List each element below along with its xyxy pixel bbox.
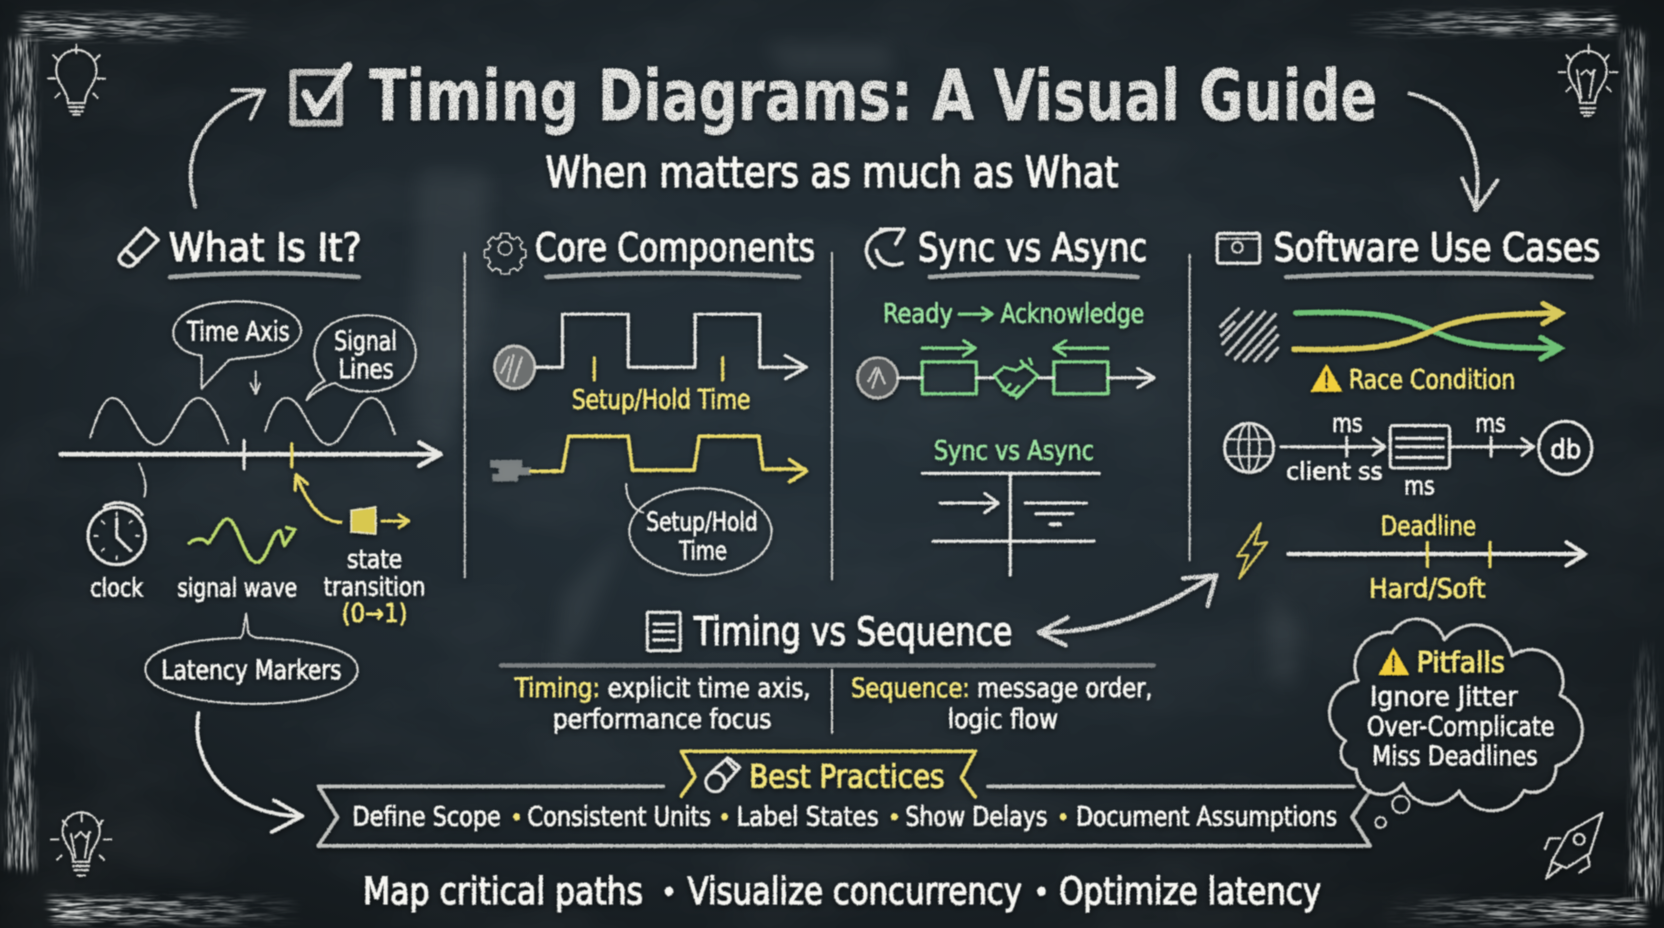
practice items: • bbox=[718, 804, 731, 832]
icon: circular arrows bbox=[866, 229, 904, 267]
footer: • bbox=[661, 875, 677, 910]
footer: Visualize concurrency bbox=[688, 870, 1022, 913]
race condition lines bbox=[1294, 304, 1561, 359]
label: state transition: transition bbox=[324, 572, 426, 602]
label: state transition bbox=[324, 545, 426, 629]
pitfall items: Over-Complicate bbox=[1367, 711, 1555, 742]
text: sequence bbox=[851, 673, 1152, 735]
heading: software use cases: Software Use Cases bbox=[1273, 226, 1600, 271]
panel: timing vs sequence bbox=[501, 610, 1154, 735]
label: ready acknowledge bbox=[883, 299, 1144, 330]
heading: sync vs async: Sync vs Async bbox=[918, 226, 1147, 271]
subtitle: When matters as much as What bbox=[545, 149, 1119, 198]
callout: signal lines bbox=[307, 315, 416, 400]
practice items: Define Scope bbox=[352, 802, 501, 833]
practice items: • bbox=[1057, 804, 1069, 832]
heading: best practices: Best Practices bbox=[749, 757, 944, 795]
panel: sync vs async bbox=[857, 226, 1155, 575]
text: timing: performance focus bbox=[553, 704, 772, 735]
sync async table bbox=[922, 473, 1099, 575]
arrow: double headed bbox=[1039, 575, 1216, 645]
icon: hatch bbox=[1220, 309, 1278, 361]
label: deadline: Deadline bbox=[1381, 511, 1476, 542]
icon: list bbox=[647, 612, 680, 651]
setup/hold clock waveform bbox=[495, 314, 807, 388]
pitfall items: Ignore Jitter bbox=[1370, 682, 1518, 713]
text: timing: Timing: explicit time axis, bbox=[514, 673, 811, 704]
label: state transition: state bbox=[347, 545, 402, 575]
latency path bbox=[1225, 409, 1592, 502]
arrow: to best practices bbox=[197, 713, 302, 832]
heading: timing vs sequence: Timing vs Sequence bbox=[693, 610, 1012, 655]
callout: latency markers: Latency Markers bbox=[161, 655, 342, 686]
icon: lightbulb bottom left bbox=[51, 812, 111, 876]
callout: signal lines: Signal bbox=[334, 326, 397, 357]
signal waves bbox=[90, 398, 395, 445]
arrow: title curve right bbox=[1409, 93, 1497, 210]
callout: latency markers bbox=[145, 613, 358, 704]
icon: clock bbox=[88, 503, 145, 565]
label: setup/hold time: Setup/Hold Time bbox=[572, 385, 750, 416]
callout: setup/hold time: Setup/Hold bbox=[646, 508, 758, 538]
label: sync vs async: Sync vs Async bbox=[934, 436, 1094, 467]
icon: warning triangle bbox=[1379, 647, 1409, 675]
latency path: db bbox=[1550, 434, 1581, 465]
practice items: Label States bbox=[736, 802, 879, 833]
deadline axis bbox=[1288, 542, 1585, 567]
icon: pencil bbox=[119, 228, 158, 266]
latency path: ms bbox=[1404, 472, 1435, 502]
icon: signal wave bbox=[189, 519, 295, 562]
footer bbox=[363, 870, 1321, 913]
state transition marker bbox=[295, 474, 409, 534]
label: ready acknowledge: Acknowledge bbox=[1001, 299, 1144, 330]
callout: time axis bbox=[173, 301, 301, 388]
handshake diagram bbox=[857, 341, 1155, 398]
footer: Map critical paths bbox=[363, 870, 643, 913]
panel: best practices bbox=[318, 751, 1370, 846]
yellow data waveform bbox=[490, 436, 807, 482]
title: Timing Diagrams: A Visual Guide bbox=[369, 55, 1377, 137]
icon: checkbox bbox=[293, 66, 348, 123]
footer: • bbox=[1034, 875, 1049, 910]
label: signal wave: signal wave bbox=[177, 573, 297, 603]
list banner bbox=[318, 786, 1370, 846]
practice items: Document Assumptions bbox=[1076, 802, 1337, 833]
practice items: Show Delays bbox=[905, 802, 1047, 833]
text: sequence: logic flow bbox=[948, 704, 1058, 735]
practice items bbox=[352, 802, 1337, 833]
text: sequence: Sequence: message order, bbox=[851, 673, 1152, 704]
icon: lightbulb top right bbox=[1559, 45, 1617, 116]
icon: warning triangle bbox=[1311, 364, 1342, 392]
pitfall items: Miss Deadlines bbox=[1372, 741, 1538, 772]
latency path: client ss bbox=[1286, 457, 1383, 486]
callout: setup/hold time bbox=[626, 484, 772, 575]
divider lines bbox=[465, 253, 1190, 579]
text: timing bbox=[514, 673, 811, 735]
label: ready acknowledge: Ready bbox=[883, 299, 953, 330]
panel: software use cases bbox=[1217, 226, 1600, 604]
heading: what is it: What Is It? bbox=[169, 226, 362, 271]
title block bbox=[293, 55, 1377, 137]
label: state transition: (0→1) bbox=[342, 599, 408, 629]
latency path: ms bbox=[1475, 409, 1506, 439]
yellow banner bbox=[681, 751, 975, 797]
icon: gear bbox=[484, 233, 526, 274]
footer: Optimize latency bbox=[1059, 870, 1321, 913]
icon: camera bbox=[1217, 233, 1260, 263]
panel: what is it bbox=[60, 226, 440, 832]
pitfall items bbox=[1367, 682, 1555, 772]
label: clock: clock bbox=[90, 573, 144, 603]
latency path: ms bbox=[1332, 409, 1363, 439]
icon: lightning bbox=[1237, 523, 1267, 578]
practice items: • bbox=[510, 804, 523, 832]
icon: rocket bbox=[1545, 813, 1602, 879]
callout: setup/hold time: Time bbox=[678, 536, 727, 566]
time axis arrow bbox=[60, 440, 440, 497]
panel: core components bbox=[484, 226, 815, 575]
arrow: title curve left bbox=[191, 90, 264, 207]
label: race condition: Race Condition bbox=[1349, 364, 1515, 395]
practice items: Consistent Units bbox=[527, 802, 711, 833]
callout: signal lines: Lines bbox=[339, 354, 394, 385]
panel: pitfalls thought cloud bbox=[1329, 619, 1582, 828]
icon: lightbulb top left bbox=[48, 45, 105, 115]
heading: core components: Core Components bbox=[535, 226, 815, 271]
heading: pitfalls: Pitfalls bbox=[1417, 645, 1505, 679]
practice items: • bbox=[888, 804, 901, 832]
callout: time axis: Time Axis bbox=[186, 317, 290, 348]
icon: flashlight bbox=[706, 758, 740, 792]
label: hard/soft: Hard/Soft bbox=[1369, 573, 1486, 604]
